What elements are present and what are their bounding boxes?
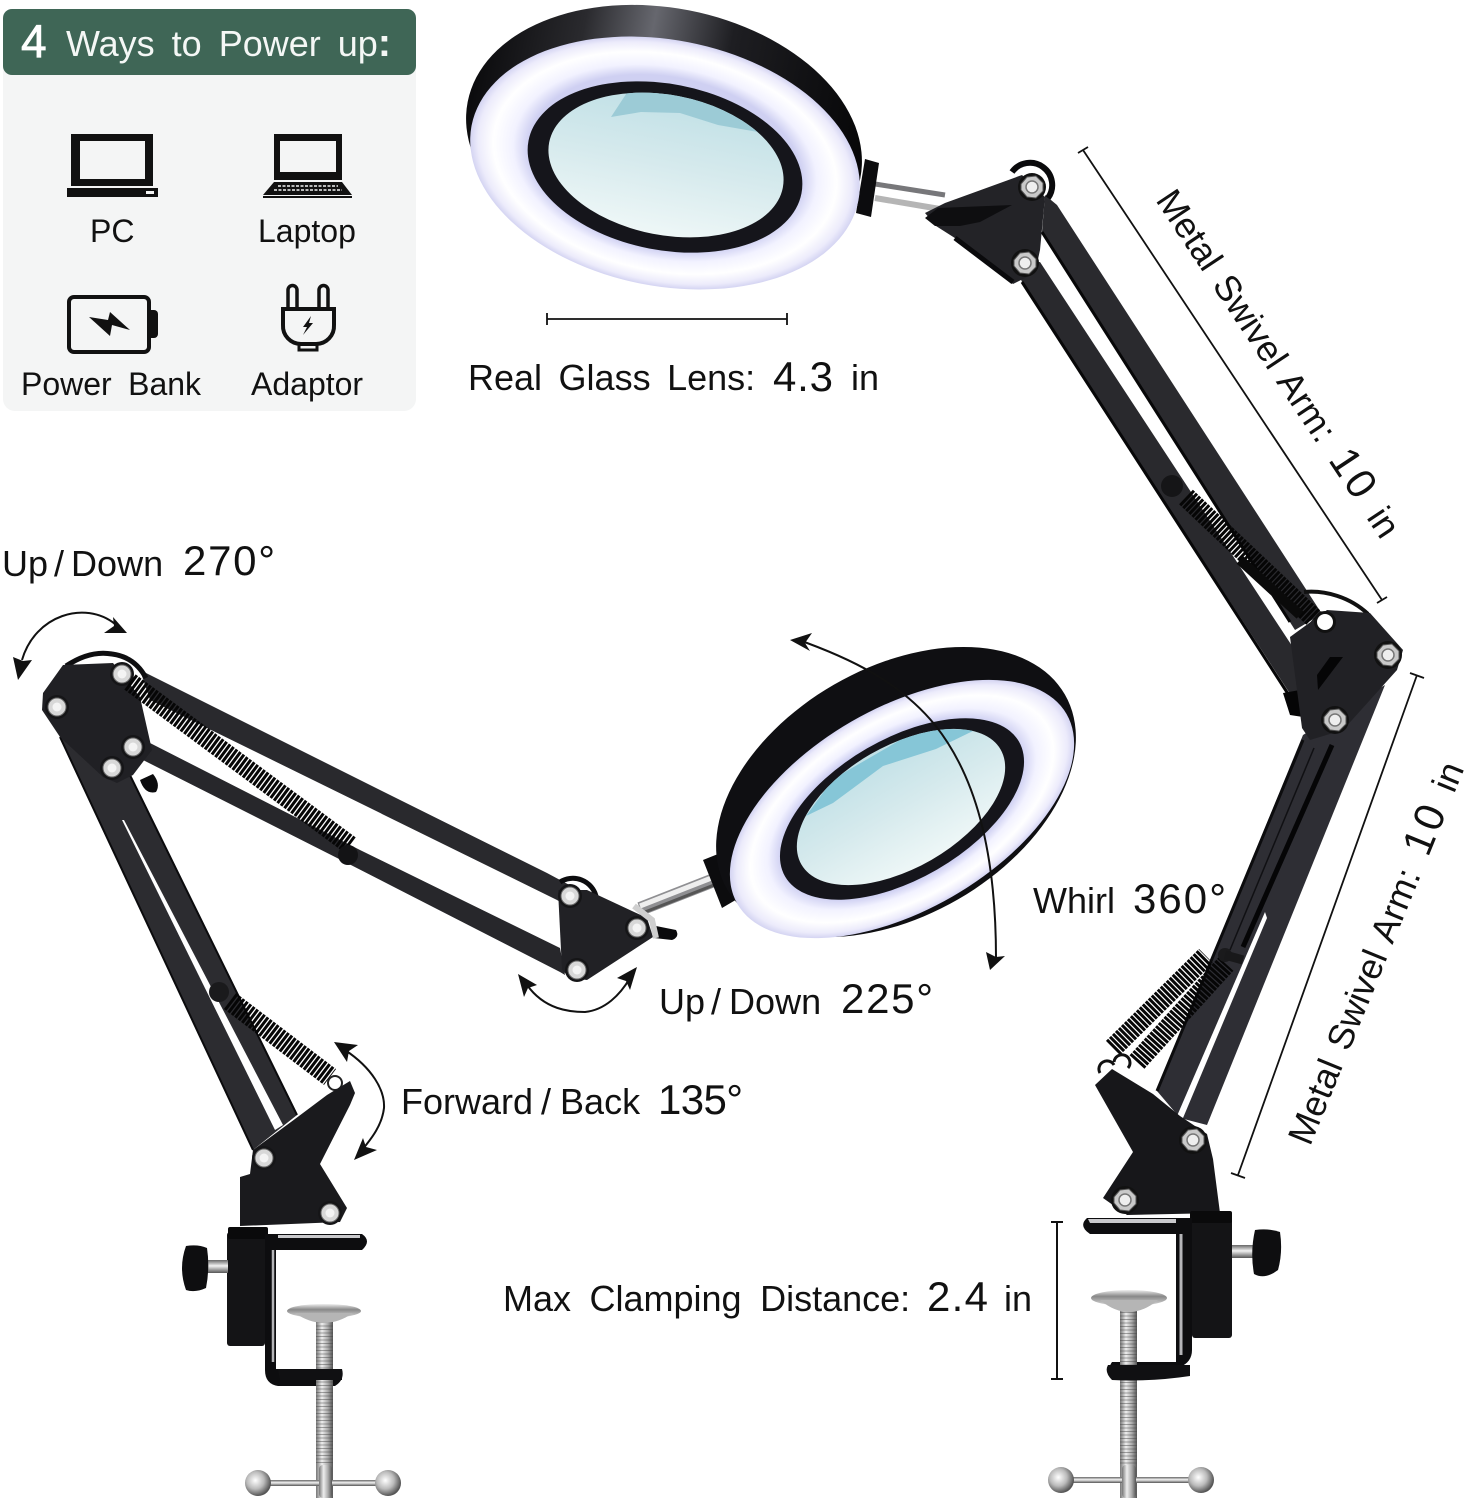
upper arm bar B xyxy=(1015,262,1298,706)
label: max clamping distance xyxy=(503,1273,1032,1320)
label: forward back 135: 135° xyxy=(658,1076,743,1123)
upper spring xyxy=(130,682,358,865)
panel: 4 ways to power up xyxy=(3,9,416,411)
label: upper metal swivel arm xyxy=(1148,179,1413,546)
label: upper metal swivel arm: in xyxy=(1359,499,1409,545)
label: real glass lens: Real Glass Lens: xyxy=(468,357,755,398)
label: upper metal swivel arm: 10 xyxy=(1320,439,1387,506)
lamp: left arm assembly xyxy=(42,653,714,1498)
lamp: right arm assembly xyxy=(925,163,1403,1498)
lower spring xyxy=(209,982,342,1090)
label: max clamping distance: 2.4 xyxy=(927,1273,988,1320)
dimension: clamp distance xyxy=(1051,1222,1063,1379)
head bracket xyxy=(925,163,1052,284)
label: up down 225: Up/Down xyxy=(659,981,821,1022)
panel header xyxy=(3,9,416,75)
lower lamp rod xyxy=(640,877,714,914)
label: forward back 135: Forward/Back xyxy=(401,1081,641,1122)
label: lower metal swivel arm: 10 xyxy=(1393,797,1455,862)
arrow: forward back 135 xyxy=(334,1042,384,1160)
icon: PC xyxy=(67,134,158,197)
upper arm bar A xyxy=(1042,195,1322,630)
dimension: upper arm length xyxy=(1078,147,1387,603)
label: up down 270: Up/Down xyxy=(2,543,163,584)
lower bracket xyxy=(1095,1069,1220,1215)
label: forward back 135 xyxy=(401,1076,743,1123)
clamp column and knob xyxy=(1190,1211,1281,1338)
lower bracket xyxy=(240,1081,355,1226)
head connector rods xyxy=(875,184,945,209)
lower bar xyxy=(143,743,565,975)
head mount tab xyxy=(703,854,739,908)
label: max clamping distance: Max Clamping Distance: xyxy=(503,1278,910,1319)
white LED ring xyxy=(687,627,1117,991)
glass lens xyxy=(796,728,1006,886)
arrow: whirl 360 xyxy=(790,633,1005,970)
panel header: 4 xyxy=(21,15,47,67)
lower arm bars xyxy=(1157,685,1385,1125)
panel header: Ways to Power up: xyxy=(66,21,391,65)
label: real glass lens xyxy=(468,353,879,400)
head mount tab xyxy=(856,159,879,217)
cable xyxy=(1304,592,1368,614)
clamp screw xyxy=(1048,1290,1214,1498)
icon: laptop xyxy=(263,134,352,198)
inner black bezel xyxy=(513,59,817,275)
label: PC: PC xyxy=(90,213,134,249)
label: Power Bank: Power Bank xyxy=(21,366,202,402)
vertical bars xyxy=(60,737,297,1150)
clamp column and knob xyxy=(182,1227,268,1346)
elbow joint plate xyxy=(1283,610,1403,740)
glass lens xyxy=(548,92,784,238)
C clamp xyxy=(265,1234,367,1386)
upper spring with pin xyxy=(1161,475,1318,622)
label: real glass lens: 4.3 xyxy=(773,353,833,400)
label: whirl 360 xyxy=(1033,875,1226,922)
label: up down 225: 225° xyxy=(841,975,933,1022)
label: lower metal swivel arm: Metal Swivel Arm: xyxy=(1279,862,1429,1150)
triangle joint xyxy=(558,878,677,982)
inner black bezel xyxy=(750,681,1054,937)
label: up down 270: 270° xyxy=(183,537,275,584)
label: Laptop: Laptop xyxy=(258,213,356,249)
lamp: lower magnifier head xyxy=(703,647,1076,938)
dimension: lens width xyxy=(547,313,787,325)
label: real glass lens: in xyxy=(851,357,879,398)
label: upper metal swivel arm: Metal Swivel Arm: xyxy=(1148,182,1345,449)
arrow: up down 225 xyxy=(518,967,637,1012)
label: Adaptor: Adaptor xyxy=(251,366,363,402)
lamp: top magnifier head xyxy=(466,4,946,290)
white LED ring xyxy=(448,5,882,321)
icon: battery power bank xyxy=(69,297,158,352)
black lamp housing xyxy=(442,0,886,308)
C clamp xyxy=(1083,1218,1192,1380)
label: up down 225 xyxy=(659,975,933,1022)
lower double springs xyxy=(1099,948,1243,1073)
dimension: lower arm length xyxy=(1231,673,1424,1178)
icon: plug adaptor xyxy=(283,286,334,350)
pivot plate xyxy=(42,653,158,792)
label: lower metal swivel arm xyxy=(1275,754,1464,1150)
upper bar xyxy=(140,670,575,905)
label: up down 270 xyxy=(2,537,275,584)
label: max clamping distance: in xyxy=(1004,1278,1032,1319)
clamp screw xyxy=(245,1304,401,1498)
label: whirl 360: Whirl xyxy=(1033,880,1115,921)
black housing xyxy=(665,587,1127,997)
label: whirl 360: 360° xyxy=(1133,875,1226,922)
arrow: up down 270 xyxy=(13,613,127,680)
